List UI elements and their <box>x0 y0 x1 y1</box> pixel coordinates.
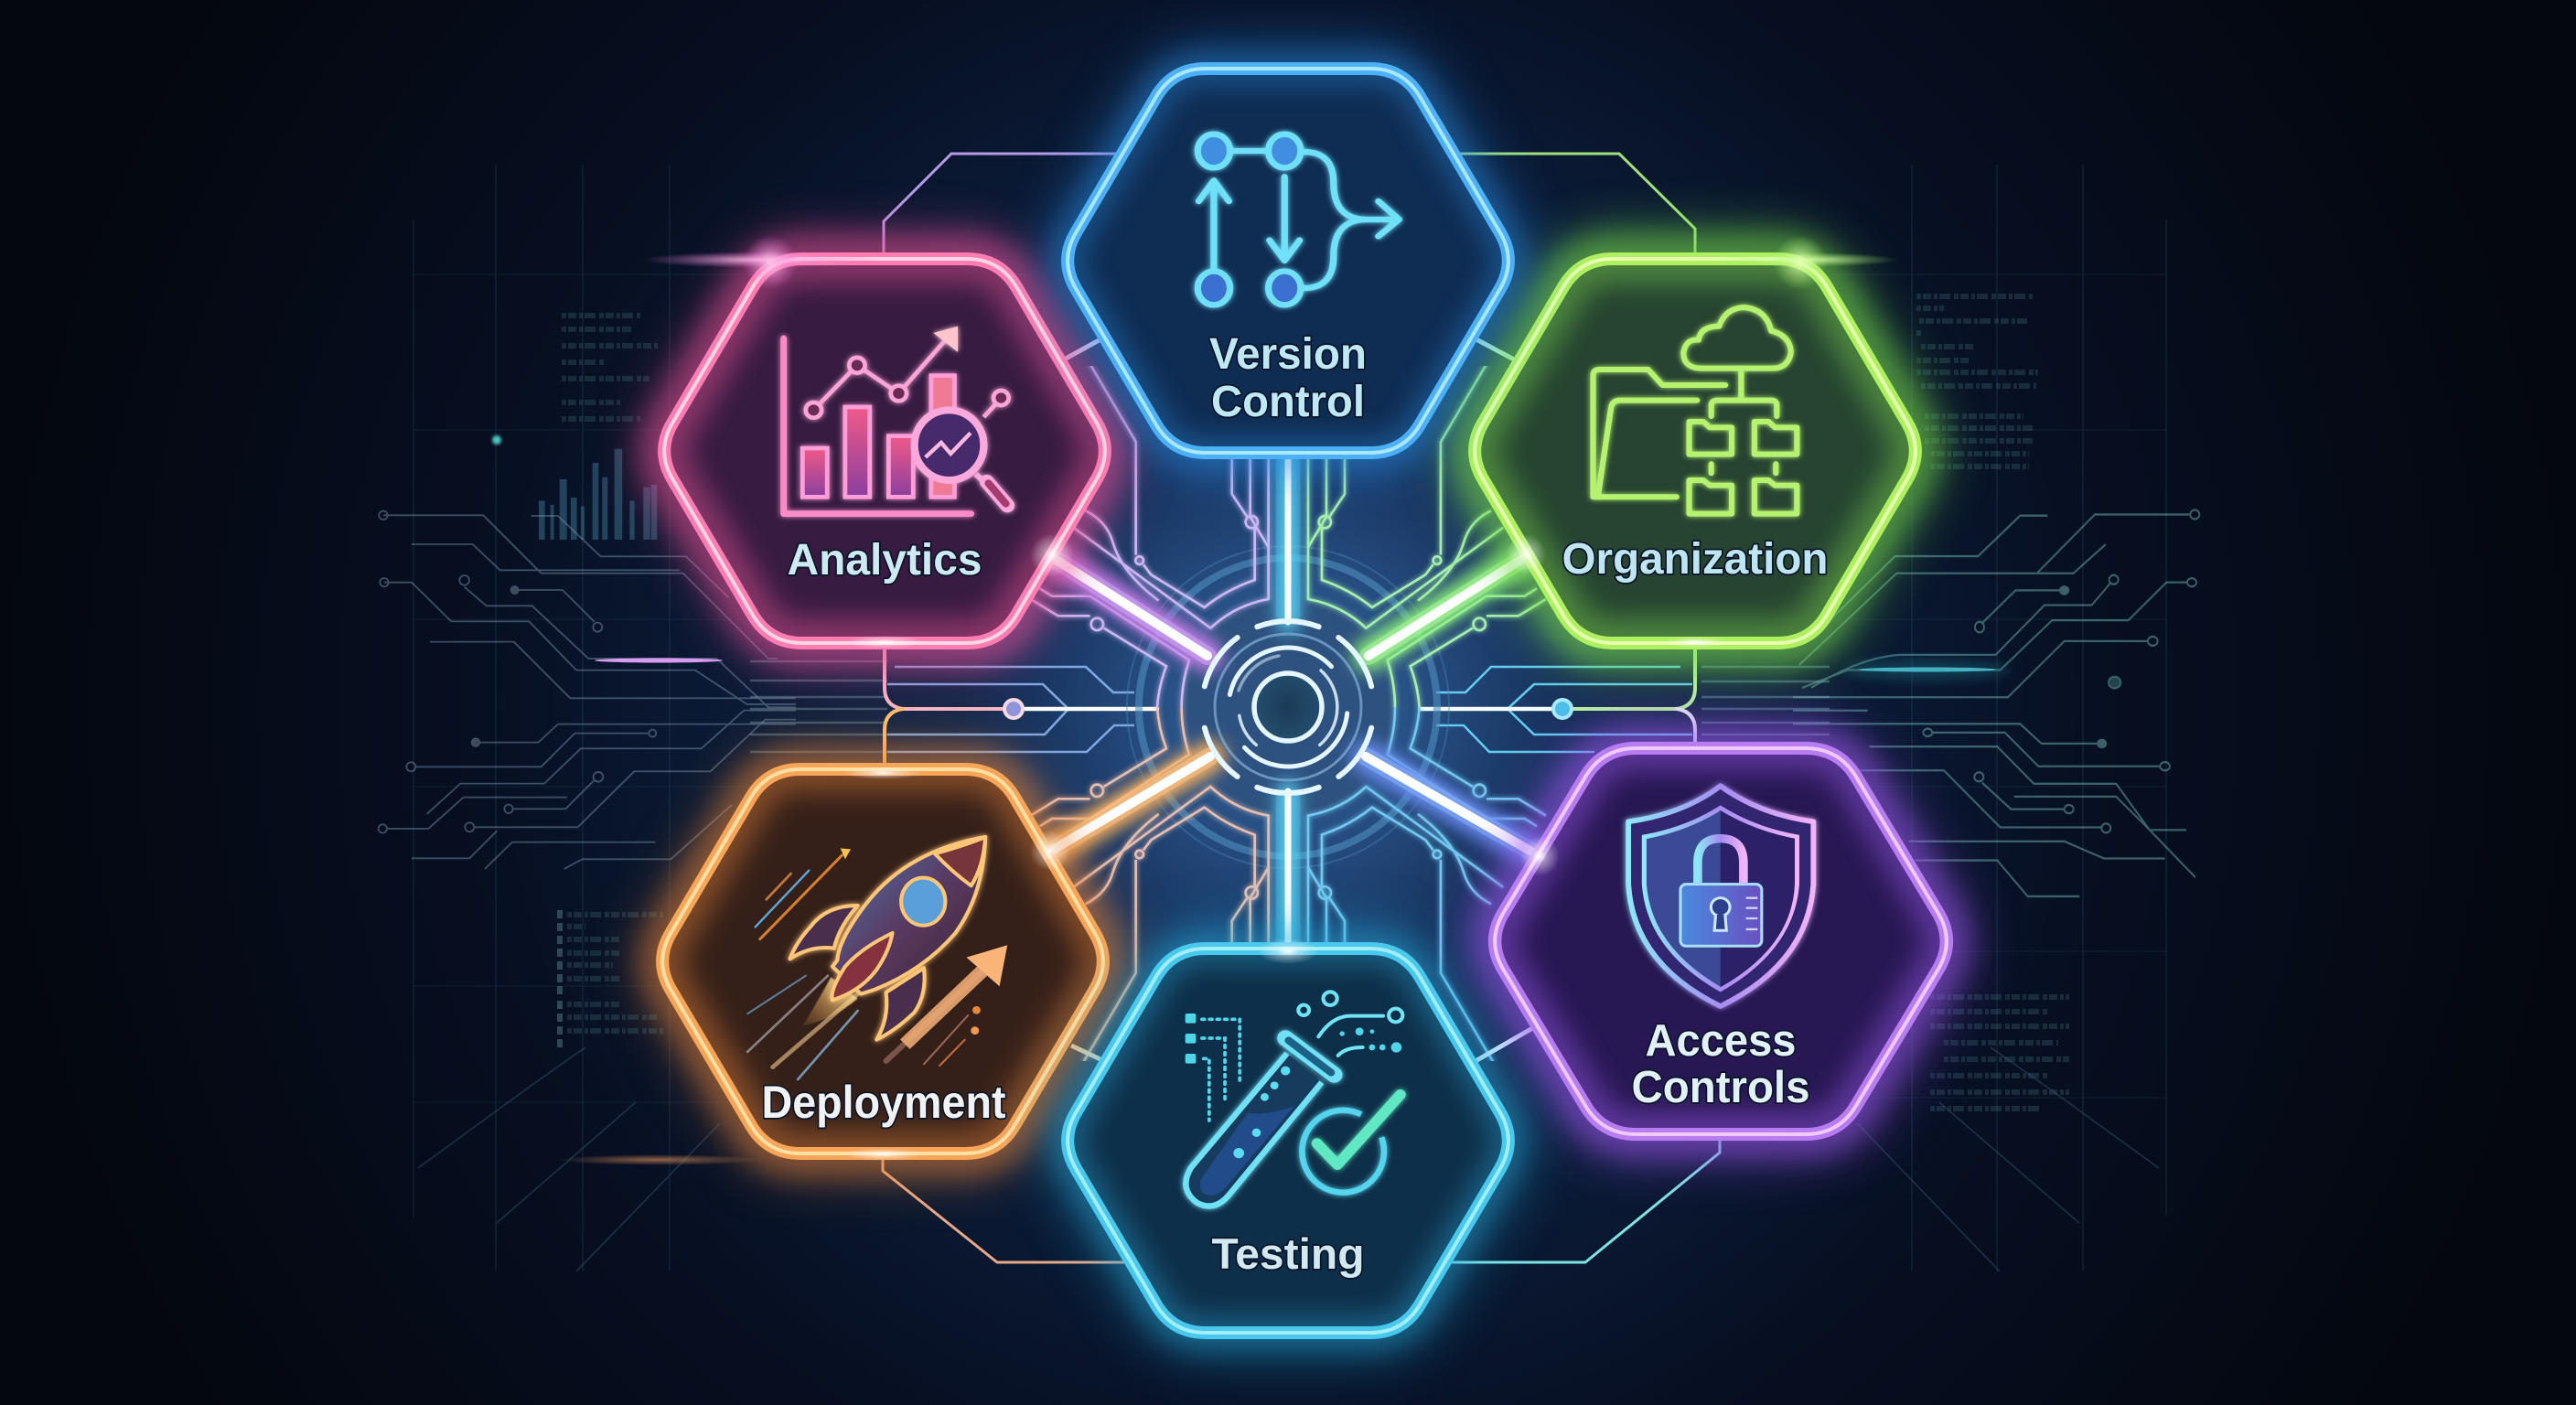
vertical trunk bands <box>1275 450 1301 951</box>
hexagon frame: Analytics <box>664 259 1105 643</box>
panel: Version Control <box>1068 69 1508 453</box>
hexagon connector lines <box>883 154 1720 1262</box>
panel: Access Controls <box>1495 748 1947 1134</box>
panel: Testing <box>1068 949 1508 1333</box>
label: Control: Control <box>1211 378 1365 426</box>
icon: shield and padlock <box>1628 786 1813 1006</box>
icon: cloud and folders <box>1594 307 1797 514</box>
circuit traces: left <box>379 511 796 869</box>
spokes: glow <box>1048 448 1546 951</box>
horizontal hub trace: right <box>1420 642 1695 750</box>
circuit traces: right <box>1793 509 2199 896</box>
faint bar chart <box>539 449 657 540</box>
light flares on traces <box>492 435 2010 1165</box>
label: Version: Version <box>1209 330 1367 379</box>
faint code marks <box>562 296 2069 1109</box>
circuit traces: central <box>1031 352 1546 1063</box>
gap traces: left <box>750 661 1134 752</box>
label: Organization: Organization <box>1562 535 1828 584</box>
label: Access: Access <box>1645 1016 1797 1066</box>
icon: git branching <box>1197 134 1399 305</box>
hexagon frame: Deployment <box>662 769 1103 1153</box>
panel: Analytics <box>664 259 1105 643</box>
icon: rocket launch <box>747 837 1007 1079</box>
spokes: bright core <box>1048 450 1546 951</box>
hexagon frame: Access Controls <box>1495 748 1947 1134</box>
hex spur lines <box>1066 338 1534 1061</box>
icon: test tube and check <box>1186 992 1402 1206</box>
hub disc and rings <box>1127 546 1449 868</box>
faint diagonal lines <box>418 1047 2159 1271</box>
code list bullets <box>557 910 563 1047</box>
hexagon frame: Organization <box>1475 259 1916 643</box>
label: Controls: Controls <box>1632 1063 1809 1112</box>
label: Analytics: Analytics <box>787 536 982 585</box>
icon: bar chart and magnifier <box>784 327 1009 514</box>
hexagon frame: Testing <box>1068 949 1508 1333</box>
horizontal hub trace: left <box>885 642 1157 773</box>
hexagon frame: Version Control <box>1068 69 1508 453</box>
background grid <box>413 165 2166 1271</box>
panel: Organization <box>1475 259 1916 643</box>
corner lens flares <box>642 235 1898 1161</box>
central glow <box>959 378 1617 1036</box>
label: Deployment: Deployment <box>761 1077 1006 1128</box>
panel: Deployment <box>662 769 1103 1153</box>
gap traces: right <box>1436 667 1830 752</box>
label: Testing: Testing <box>1211 1229 1365 1278</box>
hub rings <box>1205 621 1371 793</box>
